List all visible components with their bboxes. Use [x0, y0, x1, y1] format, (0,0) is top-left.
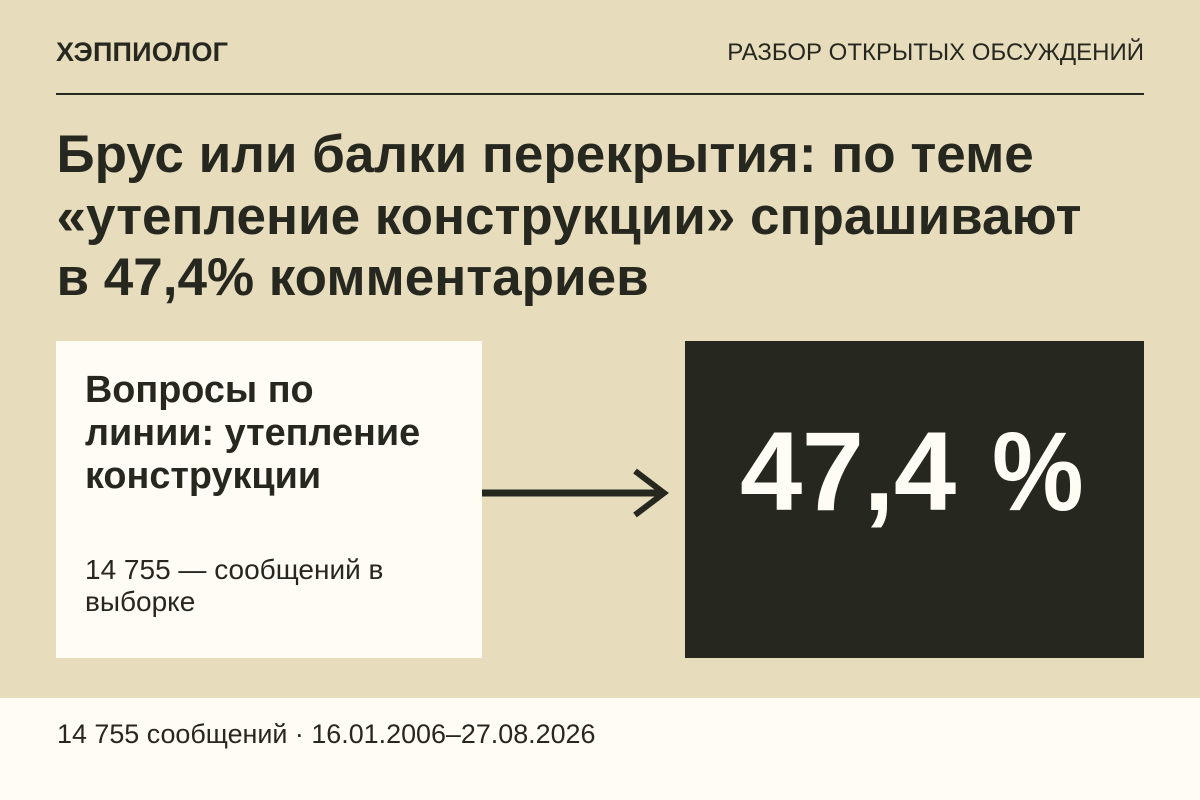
title — [56, 125, 1081, 307]
card heading — [85, 369, 420, 497]
footer band — [0, 698, 1200, 800]
result value — [740, 409, 1083, 534]
card note — [85, 554, 383, 617]
brand name: ХЭППИОЛОГ — [56, 37, 228, 67]
title: «утепление конструкции» спрашивают — [56, 186, 1081, 246]
card heading: линии: утепление — [85, 412, 420, 454]
panel: question card — [56, 341, 482, 658]
footer text: 14 755 сообщений · 16.01.2006–27.08.2026 — [57, 719, 595, 749]
card heading: Вопросы по — [85, 369, 314, 411]
card note: 14 755 — сообщений в — [85, 554, 383, 585]
header caption: РАЗБОР ОТКРЫТЫХ ОБСУЖДЕНИЙ — [727, 39, 1144, 66]
arrow — [482, 468, 669, 518]
title: в 47,4% комментариев — [56, 248, 649, 307]
result value: 47,4 — [740, 409, 956, 534]
panel: result — [685, 341, 1144, 658]
title: Брус или балки перекрытия: по теме — [56, 125, 1034, 184]
card note: выборке — [85, 586, 195, 617]
result value: % — [992, 409, 1083, 534]
card heading: конструкции — [85, 455, 321, 497]
